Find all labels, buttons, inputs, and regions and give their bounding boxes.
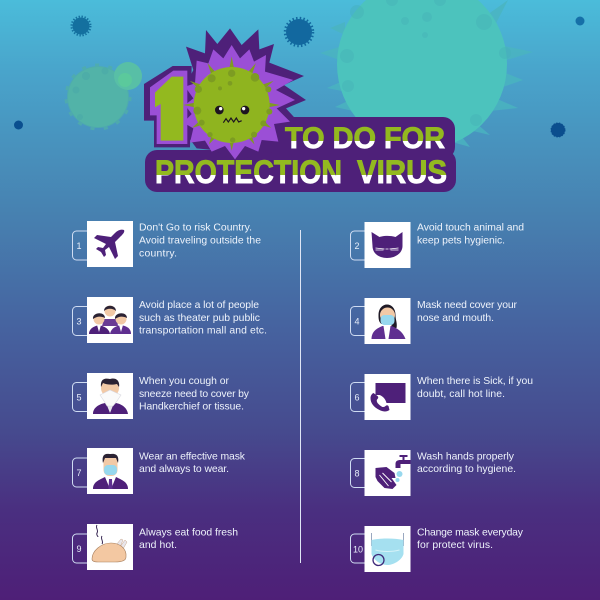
title text line 2: PROTECTION bbox=[155, 154, 342, 190]
small dark virus top left bbox=[72, 16, 90, 36]
item 8: 8 bbox=[354, 468, 360, 478]
text 3: such as theater pub public bbox=[139, 313, 260, 324]
small green background virus bbox=[67, 62, 142, 128]
text 10 bbox=[417, 527, 524, 551]
item 6: 6 bbox=[354, 392, 360, 402]
number one bbox=[144, 66, 192, 147]
item 7 bbox=[72, 448, 246, 494]
item 5 bbox=[72, 373, 250, 419]
text 10: Change mask everyday bbox=[417, 527, 524, 538]
text 3 bbox=[139, 300, 267, 337]
text 8 bbox=[417, 451, 516, 475]
number 1 and virus badge bbox=[144, 28, 306, 162]
text 2: Avoid touch animal and bbox=[417, 223, 524, 234]
item 6 bbox=[350, 374, 533, 420]
text 5: When you cough or bbox=[139, 376, 230, 387]
text 6: doubt, call hot line. bbox=[417, 389, 505, 400]
icon: roast chicken bbox=[92, 525, 127, 562]
text 9: Always eat food fresh bbox=[139, 527, 238, 538]
starburst inner bbox=[183, 45, 295, 159]
dot top right bbox=[576, 16, 584, 26]
text 7: and always to wear. bbox=[139, 464, 229, 475]
title text line 1: TO DO FOR bbox=[285, 122, 445, 155]
face bbox=[215, 106, 249, 123]
text 2: keep pets hygienic. bbox=[417, 236, 505, 246]
item 8 bbox=[350, 450, 516, 496]
text 7: Wear an effective mask bbox=[139, 451, 246, 462]
text 8: according to hygiene. bbox=[417, 464, 516, 475]
icon: cat bbox=[372, 232, 402, 258]
dot left bbox=[14, 120, 23, 130]
icon: airplane bbox=[94, 230, 124, 259]
item 3: 3 bbox=[76, 316, 82, 326]
title backing bbox=[145, 117, 456, 192]
icon: man with mask bbox=[93, 454, 128, 489]
item 7: 7 bbox=[76, 468, 82, 478]
item 4 bbox=[350, 298, 518, 344]
text 6: When there is Sick, if you bbox=[417, 376, 533, 387]
text 4: nose and mouth. bbox=[417, 313, 494, 324]
icon: surgical mask bbox=[372, 533, 404, 566]
icon: group of people bbox=[89, 306, 131, 334]
item 1 bbox=[72, 221, 261, 267]
text 10: for protect virus. bbox=[417, 540, 493, 551]
text 5: Handkerchief or tissue. bbox=[139, 402, 244, 413]
text 7 bbox=[139, 451, 246, 475]
centre divider bbox=[300, 230, 301, 563]
title text line 2: VIRUS bbox=[357, 154, 447, 190]
text 1 bbox=[139, 223, 261, 259]
item 4: 4 bbox=[354, 316, 360, 326]
text 1: Avoid traveling outside the bbox=[139, 236, 261, 246]
text 4 bbox=[417, 300, 518, 324]
icon: telephone and speech panel bbox=[370, 383, 406, 412]
title bbox=[144, 28, 456, 192]
text 5: sneeze need to cover by bbox=[139, 389, 250, 400]
text 8: Wash hands properly bbox=[417, 451, 515, 462]
item 1: 1 bbox=[76, 241, 82, 251]
item 5: 5 bbox=[76, 392, 82, 402]
item 9: 9 bbox=[76, 544, 82, 554]
small dark virus right bbox=[551, 123, 565, 137]
text 3: Avoid place a lot of people bbox=[139, 300, 259, 311]
text 5 bbox=[139, 376, 250, 413]
icon: woman with mask bbox=[372, 304, 406, 339]
icon: washing hands bbox=[376, 455, 410, 489]
text 9: and hot. bbox=[139, 540, 177, 551]
text 4: Mask need cover your bbox=[417, 300, 518, 311]
item 10 bbox=[350, 526, 524, 572]
large background virus bbox=[320, 0, 533, 149]
item 9 bbox=[72, 524, 238, 570]
starburst outer bbox=[186, 28, 306, 162]
item 10: 10 bbox=[353, 544, 363, 554]
text 3: transportation mall and etc. bbox=[139, 326, 267, 337]
text 6 bbox=[417, 376, 533, 400]
text 2 bbox=[417, 223, 524, 246]
small dark virus top centre bbox=[285, 18, 313, 46]
text 9 bbox=[139, 527, 238, 551]
icon: man covering sneeze bbox=[93, 379, 128, 414]
item 2 bbox=[350, 222, 524, 268]
text 1: country. bbox=[139, 248, 177, 259]
virus character bbox=[183, 57, 280, 151]
item 3 bbox=[72, 297, 267, 343]
text 1: Don't Go to risk Country. bbox=[139, 223, 252, 234]
item 2: 2 bbox=[354, 241, 360, 251]
